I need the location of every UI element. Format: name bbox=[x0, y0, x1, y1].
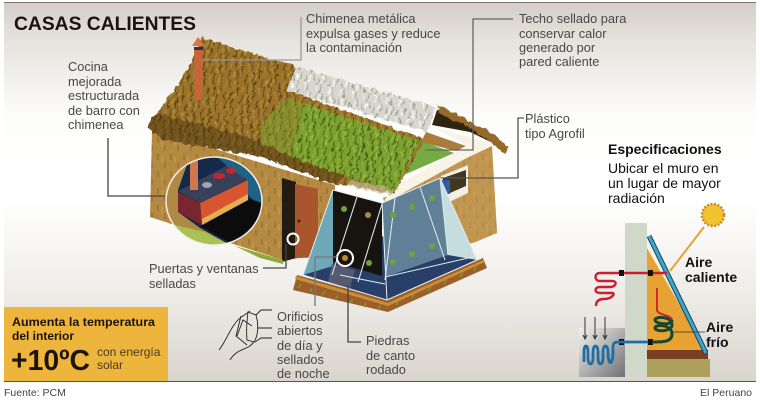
ground bbox=[647, 359, 710, 377]
blue glow bbox=[218, 158, 262, 203]
black shadow bbox=[200, 199, 262, 242]
greenhouse outline bbox=[303, 178, 477, 300]
green inner roof panel bbox=[397, 140, 454, 178]
right eave thatch bbox=[437, 105, 508, 153]
leader: stove bbox=[108, 138, 165, 196]
door bbox=[295, 184, 318, 258]
callout value: +10ºC bbox=[11, 345, 90, 377]
callout note: solar bbox=[97, 358, 123, 372]
leader: plastic bbox=[441, 118, 524, 178]
label: stove: de barro con bbox=[68, 103, 140, 118]
label: holes: de noche bbox=[277, 366, 330, 381]
plug bbox=[237, 312, 258, 342]
label: holes: sellados bbox=[277, 352, 324, 367]
tan wall part bbox=[166, 166, 226, 243]
green fade into brown bbox=[260, 98, 305, 155]
wall bbox=[625, 223, 647, 377]
eave shadow bbox=[147, 113, 345, 183]
sun bbox=[702, 204, 724, 226]
grass on base bbox=[298, 267, 476, 309]
label: holes: abiertos bbox=[277, 323, 323, 338]
spec text: un lugar de mayor bbox=[608, 175, 721, 191]
label: roof: Techo sellado para bbox=[519, 11, 627, 26]
solar wall body bbox=[647, 248, 707, 357]
label: roof: generado por bbox=[519, 40, 596, 55]
spec heading: Especificaciones bbox=[608, 141, 722, 157]
hole 1 bbox=[341, 206, 347, 212]
callout heading: Aumenta la temperatura bbox=[12, 315, 155, 329]
bracket lines bbox=[255, 310, 272, 342]
label: chimney: expulsa gases y reduce bbox=[306, 26, 440, 41]
cold shade bbox=[579, 328, 625, 377]
door frame bbox=[282, 178, 296, 262]
vent holes bbox=[341, 195, 435, 266]
label: roof: pared caliente bbox=[519, 54, 599, 69]
leader: chimney bbox=[203, 17, 301, 60]
burner gray bbox=[202, 182, 212, 188]
icon: hand holding plug bbox=[219, 310, 272, 360]
plastic strip lines bbox=[332, 178, 477, 284]
label: roof: conservar calor bbox=[519, 26, 607, 41]
leader: sealed roof bbox=[425, 19, 513, 150]
chimney band bbox=[194, 47, 203, 50]
credit: El Peruano bbox=[700, 387, 752, 399]
label: stones: Piedras bbox=[366, 333, 409, 348]
leader: holes bbox=[315, 257, 337, 306]
label: stove: estructurada bbox=[68, 88, 140, 103]
right glass face bbox=[382, 178, 448, 277]
label: cold air: Aire bbox=[706, 319, 733, 335]
stove front bbox=[200, 180, 248, 225]
hole 8 bbox=[409, 251, 415, 257]
hand outline bbox=[219, 311, 254, 360]
stove pipe bbox=[190, 158, 198, 190]
ground strip bbox=[235, 246, 283, 264]
base top edge bbox=[295, 260, 485, 306]
roof underside bbox=[432, 110, 497, 145]
right wall tint bbox=[383, 146, 497, 250]
diagram: specifications bbox=[579, 141, 737, 377]
label: chimney: Chimenea metálica bbox=[306, 11, 416, 26]
window glass bbox=[443, 170, 466, 196]
spec text: radiación bbox=[608, 190, 665, 206]
label: stove: mejorada bbox=[68, 74, 122, 89]
hole 4 bbox=[390, 212, 396, 218]
left wall bbox=[150, 130, 335, 260]
hot air pipe bbox=[596, 273, 667, 306]
door knob bbox=[297, 219, 301, 223]
glazing colour bbox=[649, 236, 706, 353]
callout: temperature bbox=[4, 307, 168, 381]
cold air pointer bbox=[672, 331, 705, 333]
left glass bbox=[303, 190, 333, 275]
top rule bbox=[4, 2, 756, 3]
white thatch section bbox=[287, 67, 437, 132]
cold air arrows bbox=[583, 317, 607, 339]
wall connectors bbox=[619, 270, 653, 345]
right wall bbox=[383, 146, 497, 250]
label: doors: Puertas y ventanas bbox=[149, 261, 259, 276]
blue shutter bbox=[441, 180, 450, 194]
inner coil bbox=[652, 317, 672, 342]
zoom circle: improved stove bbox=[165, 156, 263, 246]
stones bbox=[328, 264, 355, 288]
stove side bbox=[178, 192, 202, 225]
straw tips at eave bbox=[345, 180, 395, 195]
hole 7 bbox=[390, 259, 396, 265]
soil band bbox=[647, 350, 708, 359]
sun ray bbox=[670, 227, 704, 271]
source: Fuente: PCM bbox=[4, 387, 66, 399]
hole 9 bbox=[429, 243, 435, 249]
attic beam bbox=[421, 132, 466, 151]
label: holes: Orificios bbox=[277, 309, 323, 324]
label: stones: rodado bbox=[366, 362, 406, 377]
leader: stones bbox=[348, 285, 361, 342]
burner red 2 bbox=[226, 168, 236, 174]
black wall bbox=[333, 190, 382, 276]
label: cold air: frío bbox=[706, 334, 729, 350]
callout heading: del interior bbox=[12, 329, 74, 343]
label: stove: chimenea bbox=[68, 117, 124, 132]
timber base bbox=[293, 258, 487, 312]
label: chimney: la contaminación bbox=[306, 40, 402, 55]
bottom rule bbox=[4, 381, 756, 382]
cold air pipe bbox=[584, 342, 648, 364]
inner rising air bbox=[657, 288, 672, 320]
circle contents bbox=[166, 158, 262, 244]
window bbox=[441, 165, 468, 206]
greenhouse bbox=[293, 178, 487, 312]
chimney cap bbox=[192, 37, 205, 46]
thatch roof green bbox=[262, 98, 420, 191]
callout note: con energía bbox=[97, 345, 161, 359]
label: hot air: Aire bbox=[685, 254, 712, 270]
cream parapet bbox=[383, 127, 492, 204]
hole center bbox=[342, 255, 348, 261]
right clear panel bbox=[440, 178, 477, 260]
chimney pipe bbox=[194, 47, 203, 102]
glazing bbox=[649, 236, 706, 353]
leader lines bbox=[108, 17, 524, 342]
stove base band bbox=[202, 194, 248, 225]
hole 3 bbox=[366, 260, 372, 266]
label: plastic: Plástico bbox=[525, 111, 570, 126]
label: hot air: caliente bbox=[685, 269, 737, 285]
leader: doors bbox=[263, 244, 286, 268]
hole 6 bbox=[429, 195, 435, 201]
door seal marker bbox=[288, 234, 298, 244]
circle background bbox=[166, 157, 262, 245]
grass part bbox=[175, 225, 226, 244]
thatch roof brown bbox=[147, 38, 424, 193]
label: stones: de canto bbox=[366, 348, 415, 363]
circle border bbox=[166, 157, 262, 245]
title: CASAS CALIENTES bbox=[14, 13, 196, 35]
hole 5 bbox=[409, 204, 415, 210]
burner red 1 bbox=[213, 173, 225, 179]
highlighted hole bbox=[337, 250, 353, 266]
callout box bbox=[4, 307, 168, 381]
label: doors: selladas bbox=[149, 276, 196, 291]
label: stove: Cocina bbox=[68, 59, 109, 74]
spec text: Ubicar el muro en bbox=[608, 160, 718, 176]
label: holes: de día y bbox=[277, 338, 323, 353]
greenhouse floor bbox=[303, 230, 477, 300]
chimney bbox=[192, 37, 205, 102]
stove top bbox=[178, 166, 248, 203]
hole 2 bbox=[365, 212, 371, 218]
label: plastic: tipo Agrofil bbox=[525, 126, 585, 141]
illustration: house bbox=[147, 37, 508, 312]
